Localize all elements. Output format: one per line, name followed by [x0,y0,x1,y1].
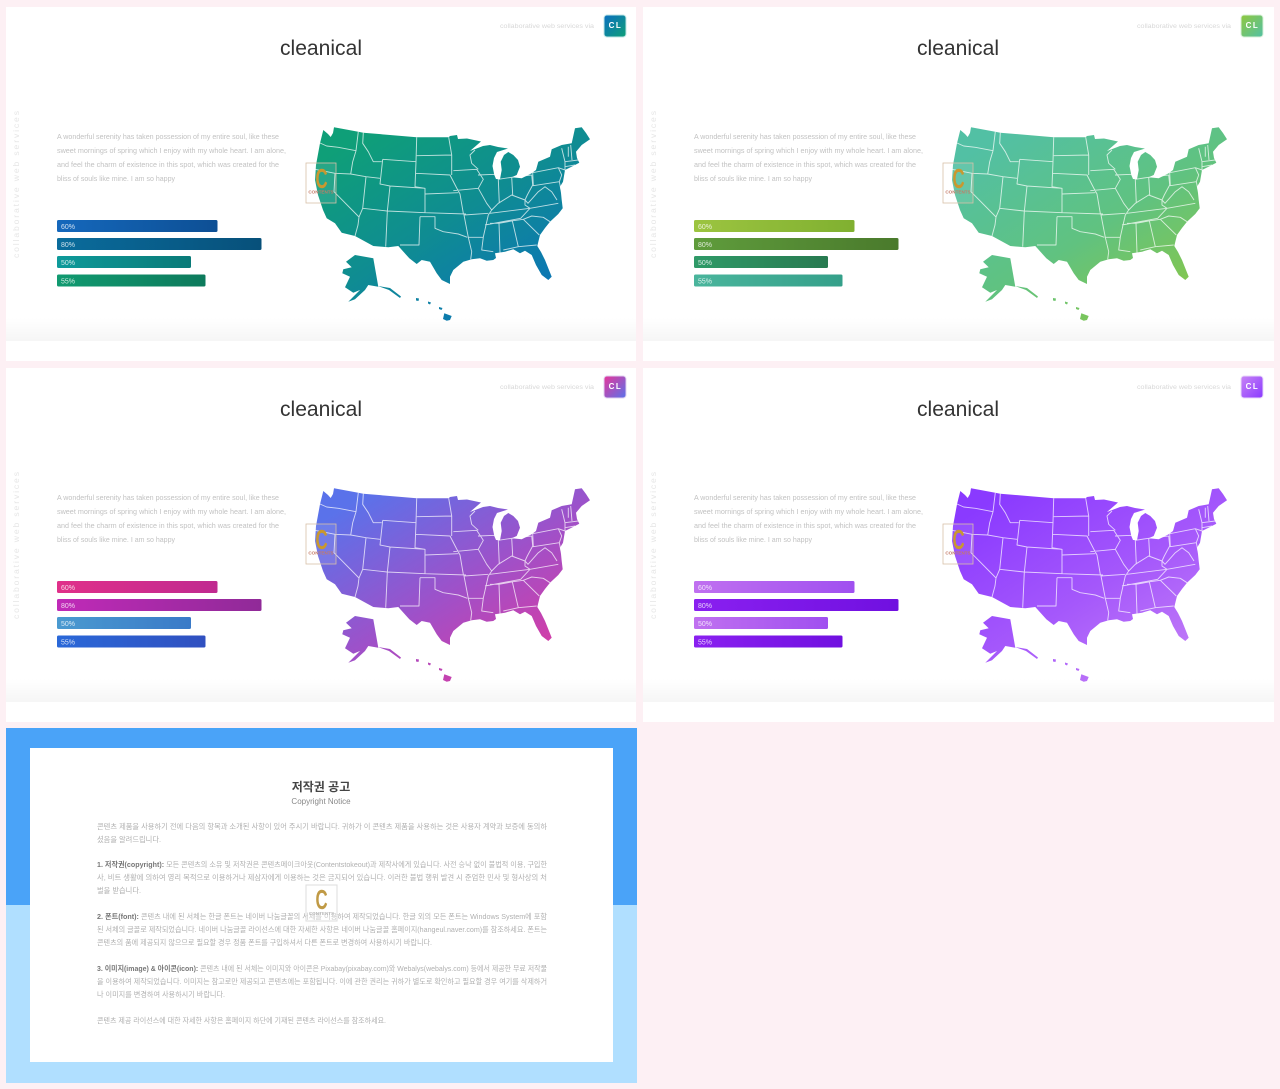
header caption: collaborative web services via [500,384,594,391]
notice subheading: Copyright Notice [291,797,351,806]
bar chart [57,220,262,286]
logo badge: CL [1246,21,1259,30]
notice body text: 을 이용하여 제작되었습니다. 이미지는 참고로만 제공되고 콘텐츠에는 포함됩니다. 이에 관한 권리는 귀하가 별도로 확인하고 필요할 경우 여기를 삭제하거 [97,977,547,986]
watermark logo: C [952,163,965,194]
panel: green slide [643,7,1274,361]
notice body text: 2. 폰트(font): 콘텐츠 내에 된 서체는 한글 폰트는 네이버 나눔글꼴의 서체를 이용하여 제작되었습니다. 한글 외의 모든 폰트는 Windows System에 포함 [97,912,547,921]
body paragraph: sweet mornings of spring which I enjoy with my whole heart. I am alone, [694,507,923,516]
notice heading: 저작권 공고 [292,779,350,794]
notice body text: 사, 비트 생활에 의하여 영리 목적으로 이용하거나 제삼자에게 이용하는 것은 금지되어 있습니다. 이러한 불법 행위 발견 시 준엄한 민사 및 형사상의 처 [97,873,547,882]
map of the United States [315,488,590,682]
bar chart: 50% [698,621,712,628]
body paragraph [57,493,286,544]
vertical side caption: collaborative web services [11,111,21,258]
notice body text: 벌을 받습니다. [97,886,141,895]
body paragraph: bliss of souls like mine. I am so happy [694,535,812,544]
logo badge [1241,15,1263,37]
bar chart: 55% [61,278,75,286]
body paragraph: A wonderful serenity has taken possession of my entire soul, like these [694,493,916,502]
title: cleanical [280,37,362,60]
body paragraph [694,132,923,183]
body paragraph: A wonderful serenity has taken possession of my entire soul, like these [57,493,279,502]
vertical side caption: collaborative web services [11,472,21,619]
logo badge: CL [1246,382,1259,391]
notice body text: 1. 저작권(copyright): 모든 콘텐츠의 소유 및 저작권은 콘텐츠메이크아웃(Contentstokeout)과 제작사에게 있습니다. 사전 승낙 없이 불법적 이용, 구입한 [97,860,547,869]
bar chart: 50% [698,260,712,267]
header caption: collaborative web services via [500,23,594,30]
notice body text: 콘텐츠의 품에 제공되지 않으므로 필요할 경우 정품 폰트를 구입하셔서 다른 폰트로 변경하여 사용하시기 바랍니다. [97,938,432,947]
body paragraph: bliss of souls like mine. I am so happy [694,174,812,183]
header caption: collaborative web services via [1137,384,1231,391]
bar chart: 50% [61,260,75,267]
body paragraph: and feel the charm of existence in this spot, which was created for the [694,160,916,169]
bar chart: 80% [698,603,712,610]
body paragraph: sweet mornings of spring which I enjoy with my whole heart. I am alone, [694,146,923,155]
watermark logo [943,524,973,564]
map of the United States [315,127,590,321]
bar chart: 80% [61,242,75,249]
notice body text: 셨음을 알려드립니다. [97,835,161,844]
body paragraph: bliss of souls like mine. I am so happy [57,535,175,544]
body paragraph: sweet mornings of spring which I enjoy with my whole heart. I am alone, [57,146,286,155]
logo badge: CL [609,21,622,30]
bar chart [57,581,262,648]
panel: pink-blue slide [6,368,636,722]
bar chart: 60% [61,224,75,231]
watermark logo: C [315,524,328,555]
logo badge [604,376,626,398]
notice body text: 콘텐츠 제품을 사용하기 전에 다음의 항목과 소개된 사항이 있어 주시기 바랍니다. 귀하가 이 콘텐츠 제품을 사용하는 것은 사용자 계약과 보증에 동의하 [97,822,547,831]
vertical side caption: collaborative web services [648,111,658,258]
watermark logo [306,163,336,203]
watermark logo [306,884,337,921]
watermark logo: C [315,884,328,915]
watermark logo: C [315,163,328,194]
title: cleanical [280,398,362,421]
watermark logo: C [952,524,965,555]
bar chart: 80% [698,242,712,249]
notice body text [97,822,547,1025]
watermark logo: CONTENTS [308,550,334,556]
body paragraph: sweet mornings of spring which I enjoy with my whole heart. I am alone, [57,507,286,516]
bar chart: 50% [61,621,75,628]
panel: purple slide [643,368,1274,722]
body paragraph [694,493,923,544]
watermark logo [306,524,336,564]
vertical side caption: collaborative web services [648,472,658,619]
notice body text: 콘텐츠 제공 라이선스에 대한 자세한 사항은 홈페이지 하단에 기재된 콘텐츠 라이선스를 참조하세요. [97,1016,386,1025]
body paragraph: and feel the charm of existence in this spot, which was created for the [57,160,279,169]
body paragraph: bliss of souls like mine. I am so happy [57,174,175,183]
bar chart: 60% [698,585,712,592]
logo badge [604,15,626,37]
watermark logo: CONTENTS [945,190,971,194]
body paragraph: A wonderful serenity has taken possession of my entire soul, like these [57,132,279,141]
map of the United States [952,127,1227,321]
bar chart [694,220,898,286]
panel: copyright notice [6,728,637,1083]
watermark logo: CONTENTS [945,550,971,556]
notice body text: 나 이미지를 변경하여 사용하시기 바랍니다. [97,990,225,999]
body paragraph: A wonderful serenity has taken possession of my entire soul, like these [694,132,916,141]
bar chart: 55% [698,278,712,286]
body paragraph: and feel the charm of existence in this spot, which was created for the [57,521,279,530]
title: cleanical [917,398,999,421]
panel: blue-green slide [6,7,636,361]
bar chart: 60% [61,585,75,592]
logo badge: CL [609,382,622,391]
notice body text: 된 서체의 글꼴로 제작되었습니다. 네이버 나눔글꼴 라이선스에 대한 자세한 사항은 네이버 나눔글꼴 홈페이지(hangeul.naver.com)를 참조하세요. 폰트는 [97,925,547,934]
body paragraph [57,132,286,183]
watermark logo [943,163,973,203]
bar chart: 60% [698,224,712,231]
bar chart: 55% [61,640,75,646]
bar chart [694,581,898,648]
bar chart: 55% [698,640,712,646]
notice body text: 3. 이미지(image) & 아이콘(icon): 콘텐츠 내에 된 서체는 이미지와 아이콘은 Pixabay(pixabay.com)와 Webalys(webalys.com) 등에서 제공한 무료 저작물 [97,964,547,973]
title: cleanical [917,37,999,60]
watermark logo: CONTENTS [309,911,334,916]
watermark logo: CONTENTS [308,190,334,194]
bar chart: 80% [61,603,75,610]
body paragraph: and feel the charm of existence in this spot, which was created for the [694,521,916,530]
header caption: collaborative web services via [1137,23,1231,30]
map of the United States [952,488,1227,682]
logo badge [1241,376,1263,398]
